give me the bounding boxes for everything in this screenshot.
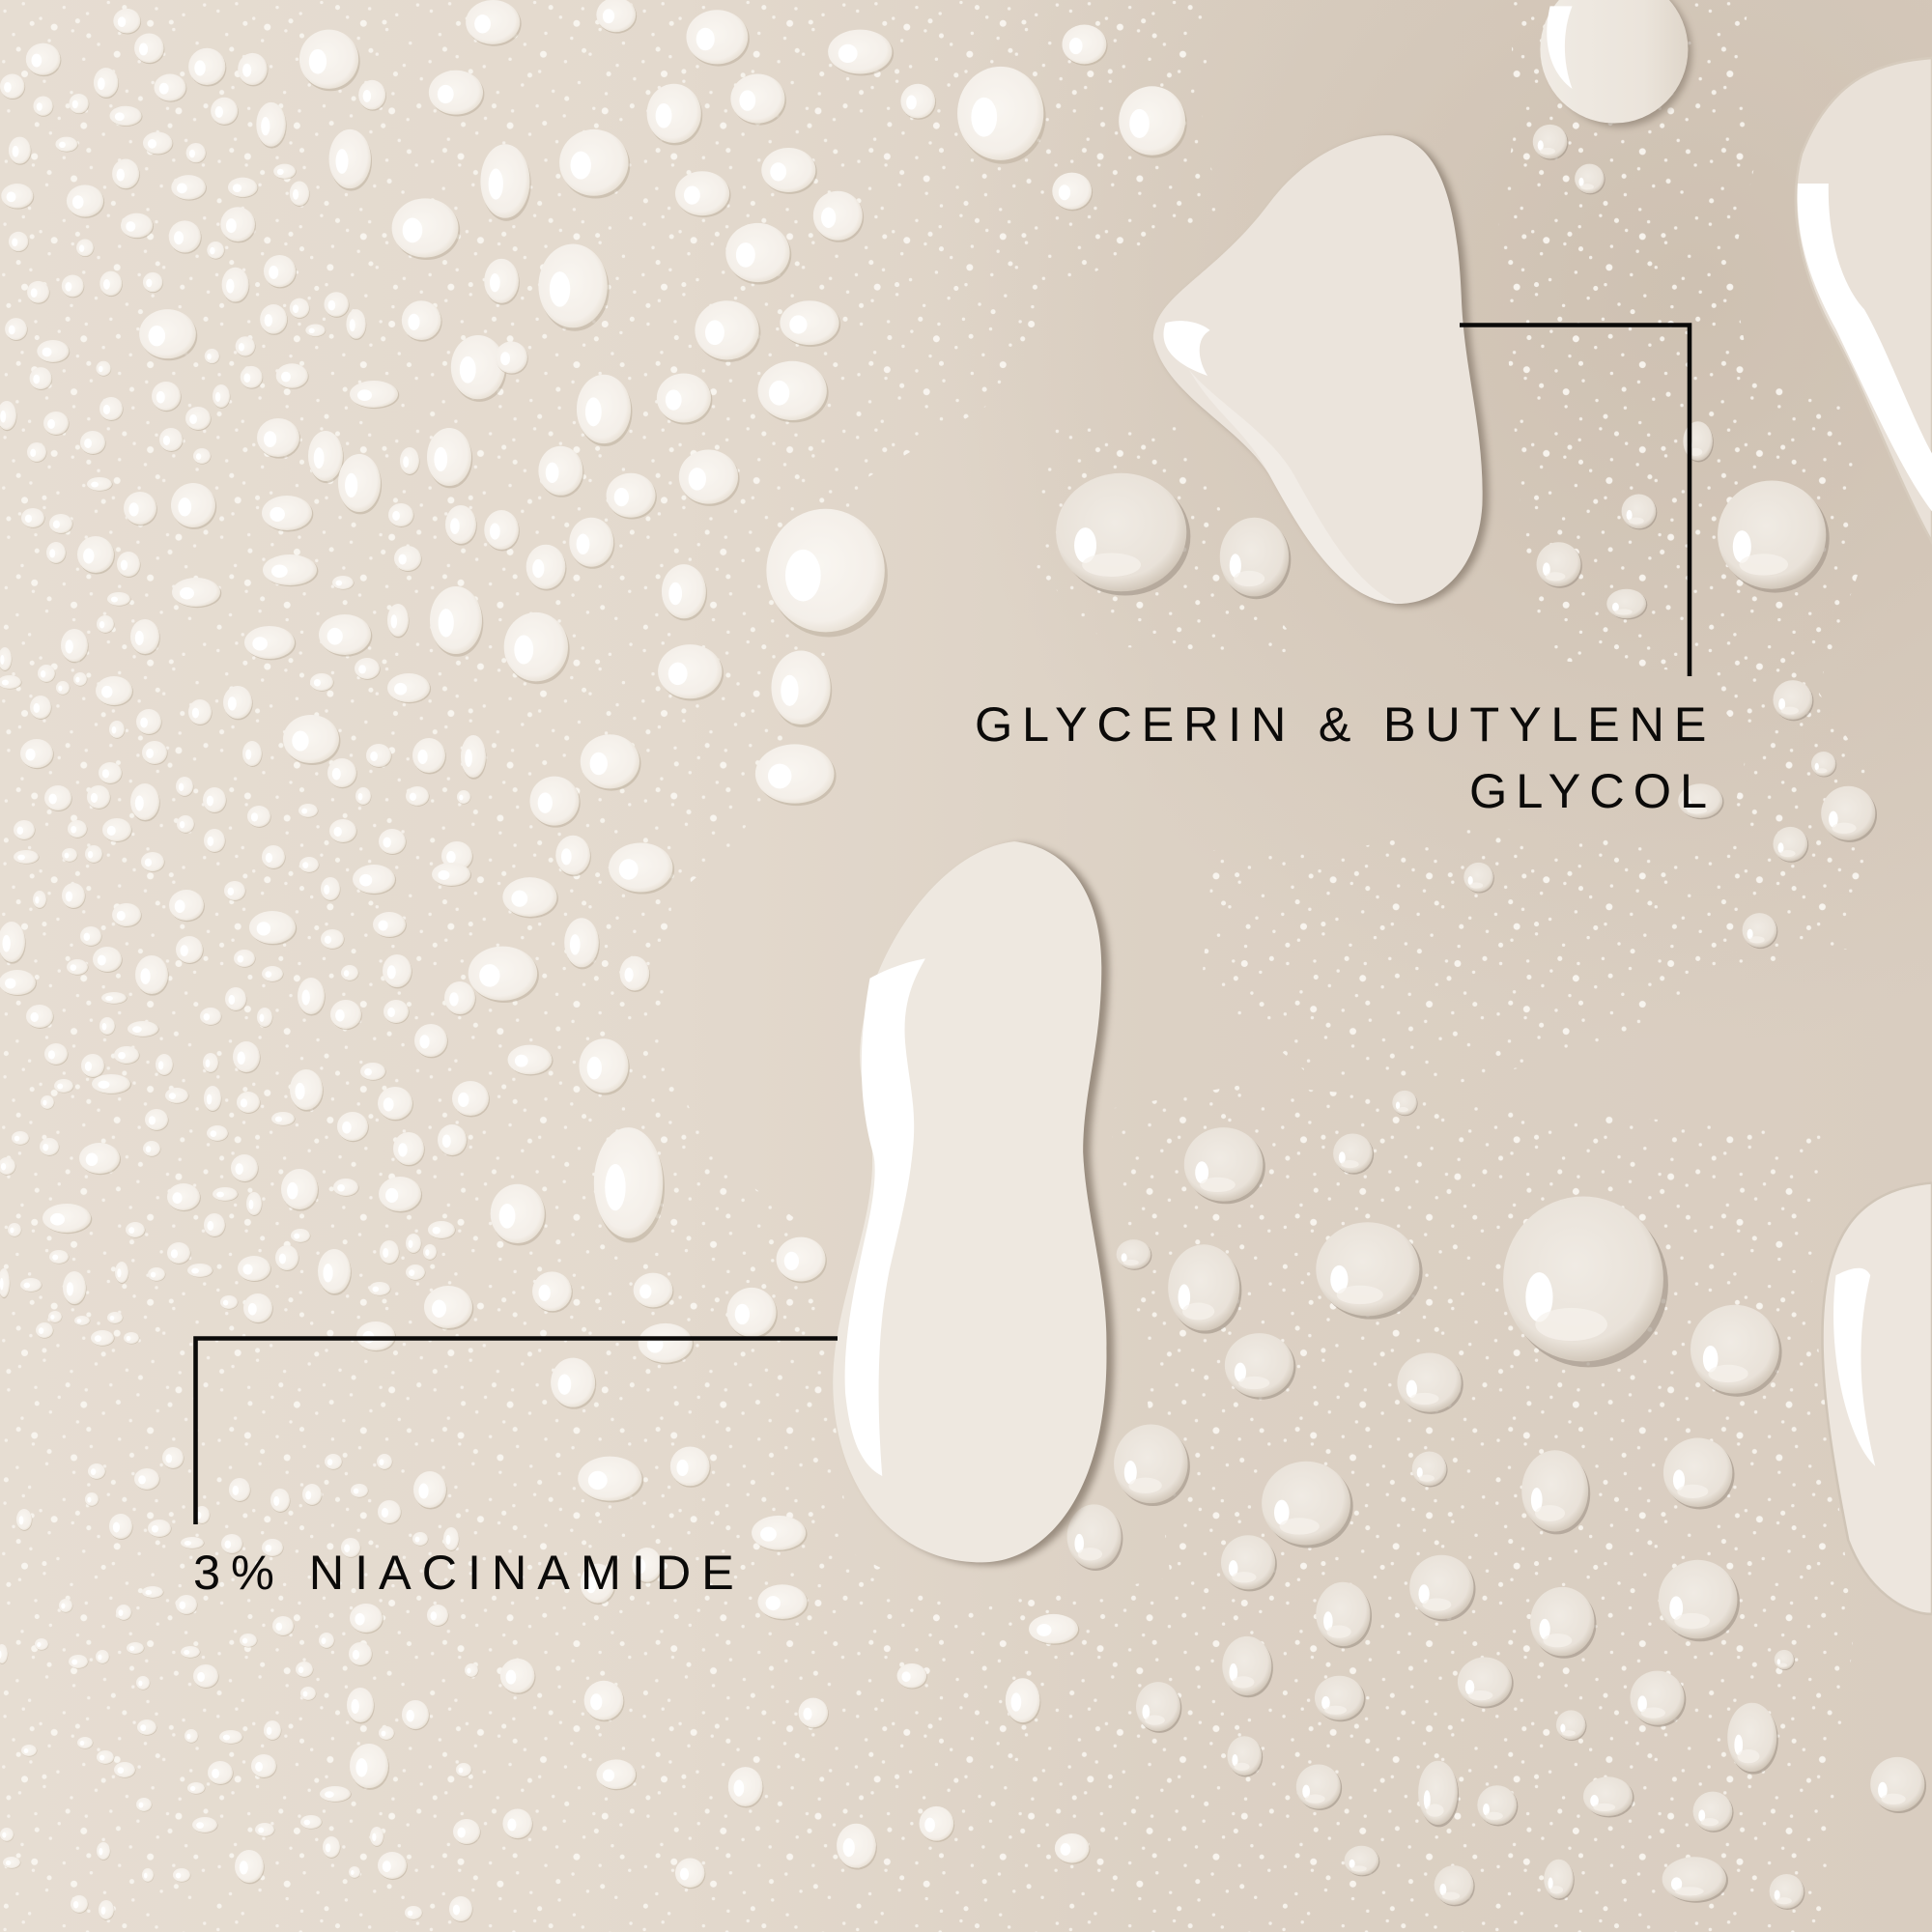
large blob: glycerin and butylene glycol xyxy=(1153,135,1489,607)
medium droplets, right side xyxy=(1056,125,1926,1910)
large blob: 3% niacinamide xyxy=(833,841,1114,1565)
large blob: right edge bottom xyxy=(1822,1182,1932,1614)
medium droplets, left column xyxy=(0,381,490,1922)
large droplet: top centre right xyxy=(1540,0,1691,127)
medium droplets, upper left xyxy=(0,0,1187,1889)
label: glycerin and butylene glycol xyxy=(975,696,1716,818)
large blob: right edge top xyxy=(1796,58,1932,542)
connector line: niacinamide callout xyxy=(195,1339,838,1524)
connector line: glycerin callout xyxy=(1460,325,1690,676)
label: glycerin and butylene glycol: GLYCERIN & BUTYLENE xyxy=(975,696,1716,752)
label: 3% niacinamide: 3% NIACINAMIDE xyxy=(193,1545,745,1600)
label: glycerin and butylene glycol: GLYCOL xyxy=(1469,763,1716,818)
